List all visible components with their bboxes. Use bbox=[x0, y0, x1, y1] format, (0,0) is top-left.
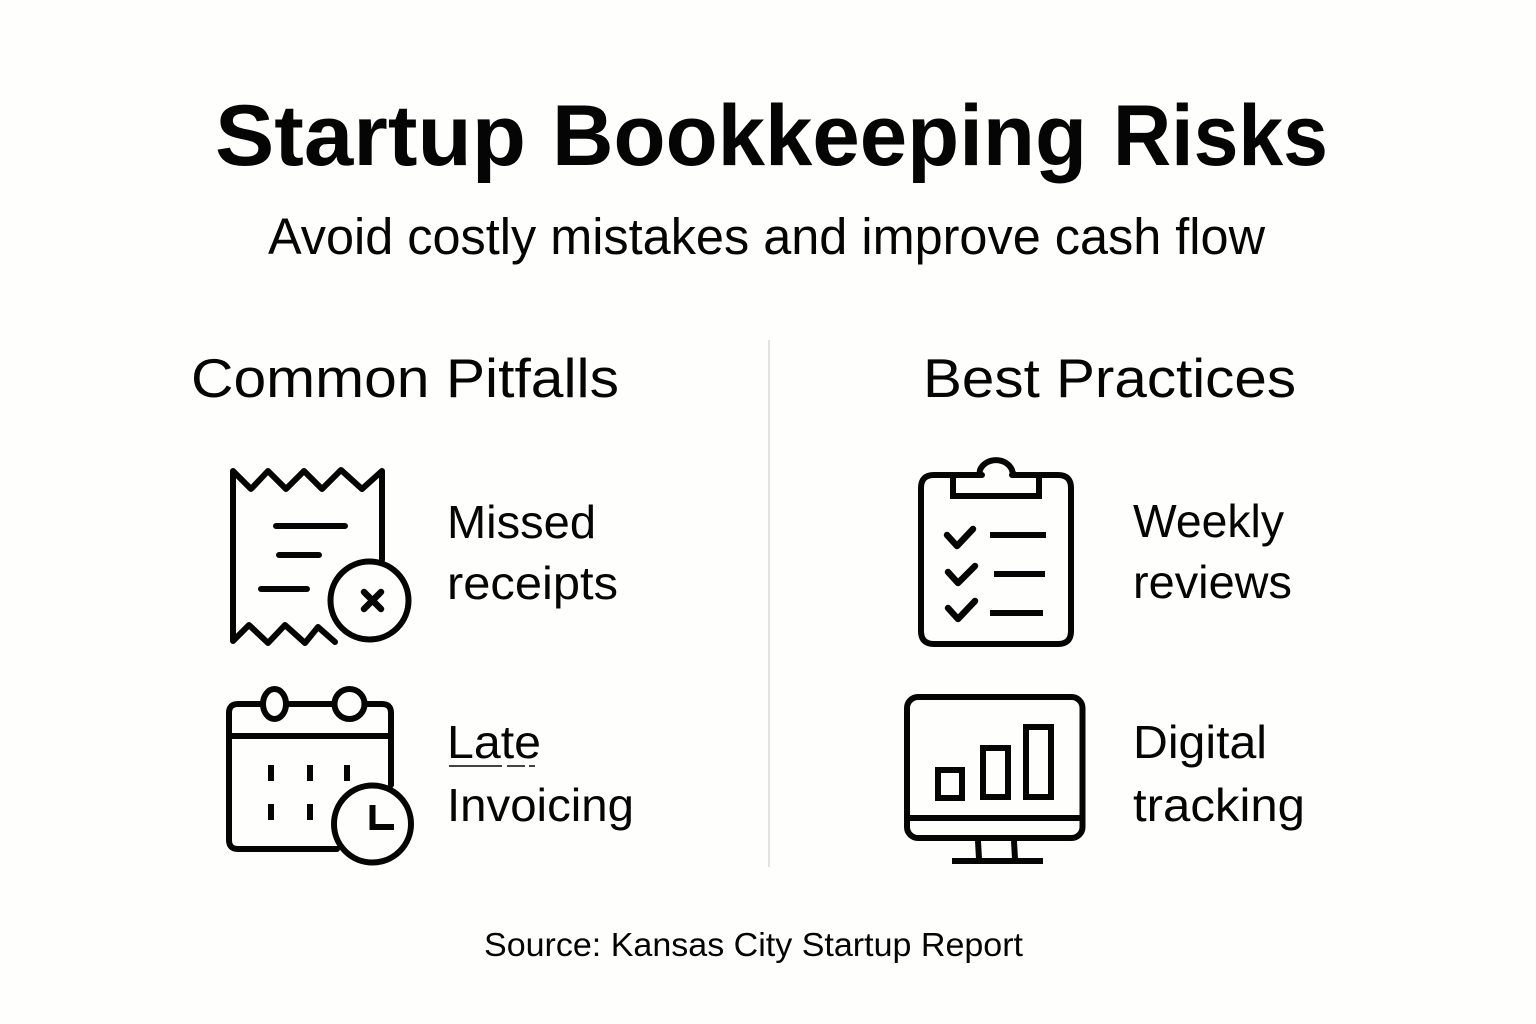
heading: best practices: Best Practices bbox=[923, 347, 1296, 409]
label: missed receipts bbox=[447, 496, 618, 609]
panel: best practices bbox=[907, 347, 1305, 861]
subtitle: Avoid costly mistakes and improve cash flow bbox=[268, 208, 1265, 265]
label: late invoicing: Invoicing bbox=[447, 779, 634, 831]
label: weekly reviews bbox=[1133, 495, 1292, 608]
title: Bookkeeping bbox=[552, 88, 1087, 184]
icon: clipboard checklist bbox=[921, 460, 1071, 644]
heading: common pitfalls: Common Pitfalls bbox=[191, 347, 619, 409]
title: Risks bbox=[1113, 88, 1328, 184]
label: weekly reviews: reviews bbox=[1133, 556, 1292, 608]
icon: monitor with bar chart bbox=[907, 697, 1082, 861]
source note: Source: Kansas City Startup Report bbox=[484, 926, 1023, 963]
label: late invoicing bbox=[447, 716, 634, 831]
icon: receipt with x bbox=[233, 470, 408, 643]
label: missed receipts: Missed bbox=[447, 496, 596, 548]
panel: common pitfalls bbox=[191, 347, 634, 862]
label: digital tracking: Digital bbox=[1133, 716, 1267, 768]
label: missed receipts: receipts bbox=[447, 557, 618, 609]
label: late invoicing: Late bbox=[447, 716, 541, 768]
title bbox=[215, 88, 1328, 184]
label: digital tracking: tracking bbox=[1133, 779, 1305, 831]
label: digital tracking bbox=[1133, 716, 1305, 831]
icon: calendar with clock bbox=[229, 689, 411, 862]
title: Startup bbox=[215, 88, 526, 184]
label: weekly reviews: Weekly bbox=[1133, 495, 1284, 547]
